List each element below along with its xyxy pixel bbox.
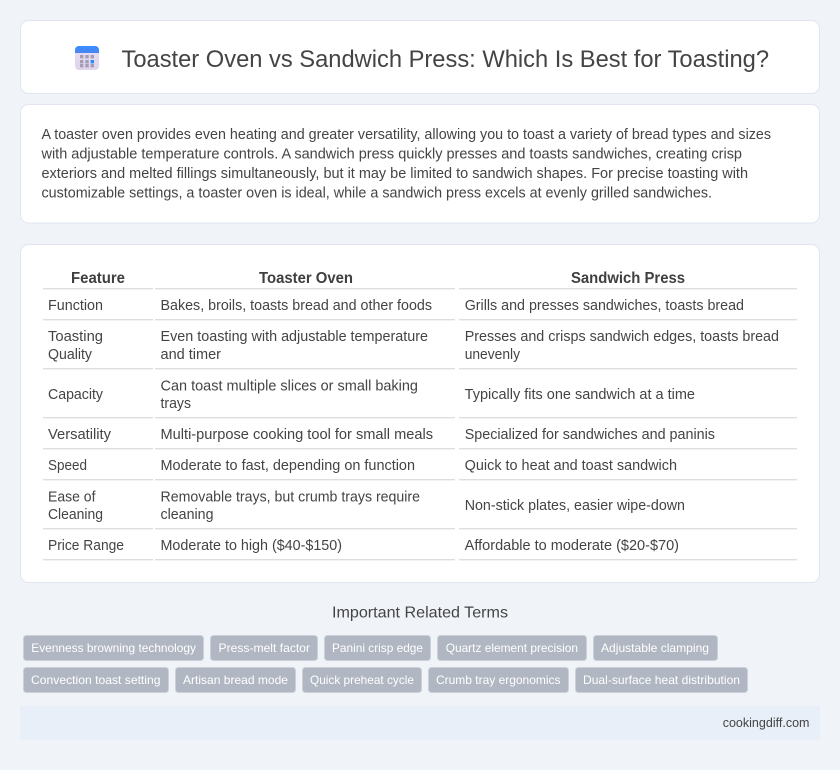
tag: Convection toast setting — [24, 668, 168, 692]
table row: Versatility: Versatility — [48, 427, 112, 443]
table row: Capacity: Capacity — [48, 387, 104, 403]
tag: Press-melt factor — [210, 636, 318, 660]
icon: calendar — [75, 46, 99, 70]
table row: Ease of Cleaning: cleaning — [160, 507, 214, 523]
table row: Price Range: Moderate to high ($40-$150) — [160, 538, 342, 554]
panel: title header — [20, 20, 820, 94]
table row: Toasting Quality: Even toasting with adjustable temperature — [160, 329, 428, 345]
tag: Quartz element precision — [438, 636, 586, 660]
panel: summary paragraph — [20, 104, 820, 223]
table row: Ease of Cleaning: Non-stick plates, easier wipe-down — [465, 498, 685, 514]
table row: Ease of Cleaning: Ease of — [48, 490, 96, 506]
table row: Speed: Quick to heat and toast sandwich — [465, 458, 677, 474]
table row: Toasting Quality: Quality — [48, 347, 93, 363]
title: Toaster Oven vs Sandwich Press: Which Is Best for Toasting? — [122, 46, 769, 73]
table header row: Toaster Oven — [259, 270, 353, 287]
tag: Convection toast setting: Convection toast setting — [31, 673, 160, 687]
footer bar — [20, 706, 820, 740]
text block: summary: A toaster oven provides even heating and greater versatility, allowing you to toast a variety of bread types and sizes — [42, 127, 771, 143]
tag: Press-melt factor: Press-melt factor — [218, 641, 310, 655]
table row: Function: Function — [48, 298, 103, 314]
table row: Toasting Quality — [48, 329, 779, 363]
tag: Adjustable clamping — [594, 636, 718, 660]
tag: Quick preheat cycle — [302, 668, 422, 692]
tag: Panini crisp edge — [324, 636, 430, 660]
footer source text: cookingdiff.com — [723, 716, 810, 730]
tag: Artisan bread mode: Artisan bread mode — [183, 673, 288, 687]
table row: Ease of Cleaning: Cleaning — [48, 507, 103, 523]
tag: Crumb tray ergonomics: Crumb tray ergonomics — [436, 673, 560, 687]
table row: Function: Bakes, broils, toasts bread and other foods — [160, 298, 432, 314]
table row: Toasting Quality: and timer — [160, 347, 221, 363]
table row: Speed: Moderate to fast, depending on function — [160, 458, 415, 474]
tag list: related terms — [24, 636, 748, 692]
text block: summary — [40, 127, 771, 202]
table row: Price Range: Affordable to moderate ($20-$70) — [465, 538, 679, 554]
table row: Versatility: Multi-purpose cooking tool for small meals — [160, 427, 433, 443]
text block: summary: with adjustable temperature controls. A sandwich press quickly presses and toasts sandwiches, creating crisp — [40, 146, 742, 162]
table row: Toasting Quality: unevenly — [465, 347, 521, 363]
table row: Capacity — [48, 378, 695, 412]
text block: summary: customizable settings, a toaster oven is ideal, while a sandwich press excels at evenly grilled sandwiches. — [42, 186, 712, 202]
table row: Function — [48, 298, 744, 314]
table row: Toasting Quality: Toasting — [48, 329, 103, 345]
table row: Price Range — [48, 538, 679, 554]
heading: related terms: Important Related Terms — [332, 604, 508, 622]
tag: Artisan bread mode — [176, 668, 296, 692]
table row: Speed: Speed — [48, 458, 87, 474]
table row: Capacity: Typically fits one sandwich at a time — [465, 387, 695, 403]
table header row: Feature — [71, 270, 125, 287]
table row: Ease of Cleaning — [48, 490, 685, 523]
tag: Panini crisp edge: Panini crisp edge — [332, 641, 423, 655]
tag: Quartz element precision: Quartz element precision — [446, 641, 578, 655]
tag: Evenness browning technology: Evenness browning technology — [31, 641, 196, 655]
table header row — [71, 270, 685, 287]
tag: Adjustable clamping: Adjustable clamping — [601, 641, 709, 655]
table row: Versatility: Specialized for sandwiches and paninis — [465, 427, 715, 443]
table header row: Sandwich Press — [571, 270, 685, 287]
panel: comparison table — [20, 244, 820, 582]
tag: Evenness browning technology — [24, 636, 204, 660]
tag: Crumb tray ergonomics — [428, 668, 568, 692]
table row: Toasting Quality: Presses and crisps sandwich edges, toasts bread — [465, 329, 779, 345]
table row: Capacity: trays — [160, 396, 191, 412]
table row: Capacity: Can toast multiple slices or small baking — [160, 378, 418, 394]
tag: Dual-surface heat distribution: Dual-surface heat distribution — [583, 673, 740, 687]
tag: Quick preheat cycle: Quick preheat cycle — [310, 673, 414, 687]
table row: Versatility — [48, 427, 715, 443]
table row: Speed — [48, 458, 677, 474]
tag: Dual-surface heat distribution — [576, 668, 748, 692]
table row: Ease of Cleaning: Removable trays, but crumb trays require — [160, 490, 420, 506]
table row: Function: Grills and presses sandwiches, toasts bread — [465, 298, 744, 314]
table row: Price Range: Price Range — [48, 538, 124, 554]
text block: summary: exteriors and melted fillings simultaneously, but it may be limited to sandwich shapes. For precise toasting with — [42, 166, 748, 182]
